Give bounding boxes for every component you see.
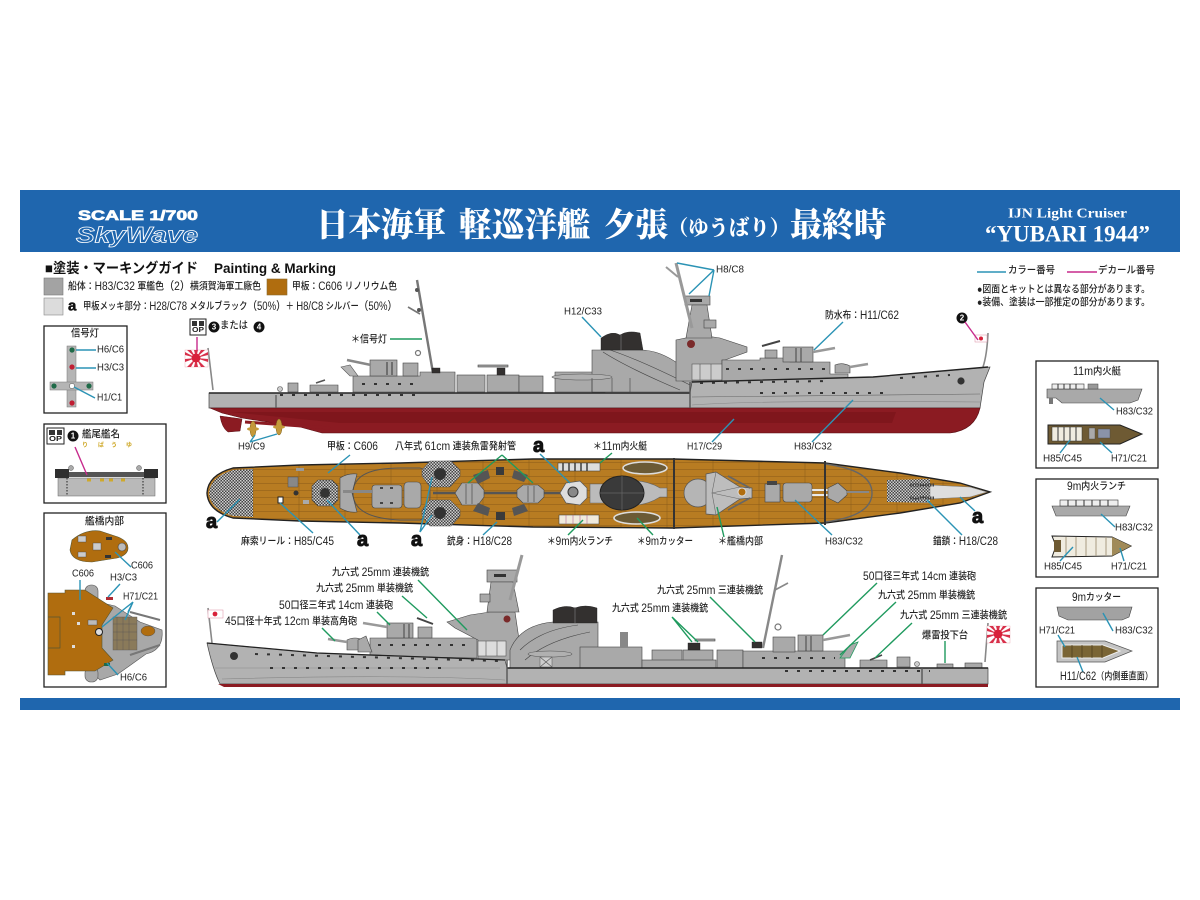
SkyWave logo: SkyWave: [76, 222, 198, 248]
callout: plated a aft tub: [327, 500, 369, 551]
callout: 14cm gun aft: 50口径三年式 14cm 連装砲: [863, 570, 976, 583]
forward superstructure and guns: [722, 341, 868, 381]
aft superstructure: [278, 360, 605, 392]
callouts: 11m boat colours: [1043, 398, 1153, 464]
panel: stern ship name: 艦尾艦名: [82, 428, 120, 440]
midship gun base: [560, 481, 587, 505]
panel: bridge interior: 艦橋内部: [85, 514, 124, 528]
callout: single 25mm aft: 九六式 25mm 単装機銃: [878, 588, 975, 602]
option note with markers 3 or 4: または: [220, 320, 248, 332]
number 1 marker: 1: [71, 432, 76, 440]
callouts: bridge colours: H71/C21: [123, 592, 158, 602]
midship superstructure: [580, 632, 762, 668]
aft gun group: [340, 468, 430, 520]
callout: plated a bow: [960, 497, 984, 528]
rudder and propellers: [220, 416, 330, 437]
callout: single 25mm fore: 九六式 25mm 単装機銃: [316, 582, 413, 595]
main title: （ゆうばり）: [668, 216, 790, 240]
lower bridge deck plan: [48, 585, 162, 682]
forward gun group: [765, 461, 872, 525]
notes: ●装備、塗装は一部推定の部分があります。: [977, 296, 1150, 308]
callout: H9/C9: H9/C9: [238, 442, 265, 452]
callout: 11m boat: [593, 440, 647, 463]
callout: triple 25mm mid: [657, 584, 763, 642]
paint legend: 甲板メッキ部分：H28/C78 メタルブラック（50%）＋ H8/C8 シルバー（50%）: [83, 300, 397, 313]
callouts: cutter colours: H71/C21: [1039, 626, 1075, 636]
deck outline: [207, 459, 990, 528]
stern drawing: [55, 466, 158, 496]
callout: deck colour: 甲板：C606: [327, 440, 378, 453]
callout: stern ensign decal: [196, 337, 198, 350]
english subtitle: [985, 206, 1150, 246]
funnel plan: [590, 476, 667, 510]
callouts: 11m boat colours: H85/C45: [1043, 454, 1082, 464]
aft superstructure and guns: [743, 635, 982, 668]
cutter top view: [1057, 641, 1132, 662]
option note with markers 3 or 4: OP: [192, 327, 204, 334]
boat side view: [1047, 384, 1142, 404]
callout: plated a stern: [206, 499, 240, 533]
callout: twin 25mm fore: 九六式 25mm 連装機銃: [332, 566, 429, 579]
callout: H17/C29: H17/C29: [687, 442, 722, 452]
callout: gun barrel: [447, 522, 512, 548]
decal letters: [82, 441, 132, 449]
callouts: bridge colours: C606: [72, 568, 94, 580]
callouts: 11m boat colours: H83/C32: [1116, 406, 1153, 418]
bow anchor deck: [887, 479, 987, 503]
callout: 12cm AA gun: [225, 614, 357, 641]
notes: [977, 282, 1150, 308]
callout: plated a midship: a: [533, 435, 545, 457]
callout: triple 25mm mid: 九六式 25mm 三連装機銃: [657, 584, 763, 597]
panel: signal lights: 信号灯: [71, 326, 99, 340]
callouts: bridge colours: H3/C3: [110, 572, 137, 584]
funnel and trunking: [552, 332, 692, 392]
callout: deck colour: [327, 440, 378, 473]
gun tub: aft: [312, 480, 338, 506]
callout: number 2 bow jack: 2: [960, 314, 965, 322]
boat top view: [1048, 425, 1142, 444]
callouts: signal colours: H3/C3: [97, 362, 124, 374]
callout: hemp reel: [241, 503, 334, 548]
callout: bridge interior: ＊艦橋内部: [718, 534, 763, 548]
callout: 9m cutter: ＊9mカッター: [637, 536, 693, 548]
paint legend: a: [68, 298, 77, 314]
callouts: bridge colours: C606: [131, 560, 153, 572]
callout: twin 25mm mid: [612, 602, 708, 642]
bottom band: [20, 698, 1180, 710]
callout: H12/C33: [564, 306, 602, 337]
bow jack: [208, 608, 223, 643]
aft mast: [763, 555, 788, 648]
deck plan: [207, 458, 990, 529]
panel: 9m cutter: [1036, 588, 1158, 687]
callouts: signal colours: [74, 344, 124, 404]
top ship callouts: [197, 263, 978, 452]
paint legend: [44, 278, 397, 315]
callouts: bridge colours: [72, 552, 158, 684]
icon: option marker: OP: [49, 436, 62, 443]
decal letters: ば: [98, 441, 104, 449]
callout: depth charge rack: 爆雷投下台: [922, 628, 968, 642]
decal letters: り: [82, 441, 88, 449]
callout: signal lamp: [351, 332, 422, 346]
panel: signal lights: [44, 326, 127, 413]
gun tubs: waist: [422, 461, 460, 526]
callout: H9/C9: [238, 434, 277, 452]
stern ensign: [985, 623, 1010, 662]
callout: single 25mm aft: [840, 588, 975, 655]
panel: 9m motor launch: 9m内火ランチ: [1067, 480, 1126, 493]
swatch: deck: [267, 279, 287, 295]
callout: plated a bow: a: [972, 506, 984, 528]
main title: [316, 206, 886, 244]
bow jack: [975, 333, 988, 367]
callout: single 25mm fore: [316, 582, 427, 618]
callout: 9m launch: [547, 520, 613, 548]
stern ensign: [185, 348, 213, 390]
aft mast: [408, 280, 433, 373]
callout: plated a midship: [533, 435, 570, 483]
callout: H8/C8: [677, 263, 744, 296]
deck plan callouts: [206, 435, 998, 551]
callouts: launch colours: [1044, 514, 1153, 572]
callout: H17/C29: [687, 419, 734, 452]
painting guide heading: ■塗装・マーキングガイド: [45, 260, 198, 276]
callout: plated a waist tubs: [411, 477, 432, 551]
callout: 14cm gun fore: 50口径三年式 14cm 連装砲: [279, 598, 393, 612]
callouts: launch colours: H85/C45: [1044, 562, 1082, 572]
boats on deck plan: [558, 462, 667, 524]
callout: triple 25mm aft: 九六式 25mm 三連装機銃: [900, 608, 1007, 622]
callouts: signal colours: H1/C1: [97, 392, 122, 404]
panel: 11m motor boat: [1036, 361, 1158, 468]
callout: twin 25mm fore: [332, 566, 467, 630]
callout: bridge interior: [717, 507, 763, 548]
painting guide heading: Painting & Marking: [214, 260, 336, 276]
callout: 14cm gun fore: [279, 598, 393, 625]
decal letters: ゆ: [126, 442, 132, 449]
callout: waterproof cloth: [814, 308, 899, 350]
callout: 14cm gun aft: [823, 570, 976, 635]
english subtitle: IJN Light Cruiser: [1008, 206, 1127, 222]
panel: stern ship name: [44, 424, 166, 503]
callout: depth charge rack: [922, 628, 968, 663]
notes: ●図面とキットとは異なる部分があります。: [977, 282, 1150, 296]
option note with markers 3 or 4: 3: [212, 322, 217, 332]
line colour legend: デカール番号: [1098, 264, 1155, 276]
callout: twin 25mm mid: 九六式 25mm 連装機銃: [612, 602, 708, 615]
stern plated area: [209, 469, 253, 517]
callout: turret colour: [795, 500, 863, 548]
launch side view: [1052, 500, 1130, 516]
swatch: plated deck: [44, 298, 63, 315]
launch top view: [1052, 536, 1131, 557]
callout: H83/C32 hull: H83/C32: [794, 442, 832, 452]
callouts: signal colours: H6/C6: [97, 344, 124, 356]
callouts: cutter colours: H83/C32: [1115, 626, 1153, 636]
swatch: hull: [44, 278, 63, 295]
line colour legend: カラー番号: [1008, 264, 1055, 276]
callout: hemp reel: 麻索リール：H85/C45: [241, 534, 334, 548]
callout: 9m launch: ＊9m内火ランチ: [547, 534, 613, 548]
callout: plated a aft tub: a: [357, 529, 369, 551]
hull: [207, 643, 988, 687]
forward gun group: [328, 618, 477, 658]
beam bar: [673, 458, 675, 529]
callout: 9m cutter: [637, 518, 693, 548]
callouts: cutter colours: [1039, 613, 1153, 683]
option note with markers 3 or 4: 4: [257, 322, 262, 332]
callout: anchor chain: 錨鎖：H18/C28: [933, 534, 998, 548]
panel: 11m motor boat: 11m内火艇: [1073, 364, 1121, 378]
callout: gun barrel: 銃身：H18/C28: [447, 534, 512, 548]
top ship: starboard profile: [185, 263, 990, 437]
callout: plated a stern: a: [206, 511, 218, 533]
bridge tower and foremast: [666, 263, 747, 381]
callout: signal lamp: ＊信号灯: [351, 332, 387, 346]
callout: waterproof cloth: 防水布：H11/C62: [825, 308, 899, 322]
bottom ship: port profile: [207, 555, 1010, 687]
panel: 9m cutter: 9mカッター: [1072, 592, 1121, 604]
callout: number 2 bow jack: [956, 312, 978, 340]
panel: bridge interior: [44, 513, 166, 687]
callout: torpedo tubes: 八年式 61cm 連装魚雷発射管: [395, 440, 516, 453]
decal letters: う: [111, 441, 117, 449]
callout: 12cm AA gun: 45口径十年式 12cm 単装高角砲: [225, 614, 357, 628]
line colour legend: [977, 264, 1155, 276]
main title: 最終時: [790, 207, 886, 244]
upper bridge deck plan: [70, 531, 128, 562]
callouts: launch colours: H83/C32: [1115, 522, 1153, 534]
callout: 11m boat: ＊11m内火艇: [593, 440, 647, 453]
paint legend: 甲板：C606 リノリウム色: [292, 280, 397, 293]
deck fittings: [278, 468, 309, 504]
main title: 日本海軍: [316, 206, 446, 244]
callout: H83/C32 hull: [794, 400, 853, 452]
callout: torpedo tubes: [395, 440, 533, 483]
scale label: SCALE 1/700: [78, 207, 198, 223]
bottom ship callouts: [225, 566, 1007, 663]
callouts: launch colours: H71/C21: [1111, 562, 1147, 572]
cutter side view: [1057, 607, 1132, 620]
paint legend: 船体：H83/C32 軍艦色（2）横須賀海軍工廠色: [68, 280, 261, 293]
header band: [20, 190, 1180, 252]
painting guide heading: [45, 260, 336, 276]
signal light cross: [50, 346, 93, 407]
callout: H12/C33: H12/C33: [564, 306, 602, 318]
hull: [209, 367, 990, 433]
main title: 夕張: [603, 207, 668, 244]
english subtitle: “YUBARI 1944”: [985, 222, 1150, 246]
bridge tower and foremast: [447, 555, 522, 660]
callout: triple 25mm aft: [875, 608, 1007, 658]
callout: plated a waist tubs: a: [411, 529, 423, 551]
callouts: 11m boat colours: H71/C21: [1111, 454, 1147, 464]
main title: 軽巡洋艦: [459, 207, 590, 244]
funnel and trunking: [510, 606, 598, 668]
option note with markers 3 or 4: [190, 319, 264, 335]
torpedo tubes: [433, 467, 565, 520]
callout: turret colour: H83/C32: [825, 536, 863, 548]
callout: H8/C8: H8/C8: [716, 264, 744, 276]
callouts: cutter colours: H11/C62（内側垂直面）: [1060, 670, 1153, 683]
panel: 9m motor launch: [1036, 479, 1158, 577]
callouts: bridge colours: H6/C6: [120, 672, 147, 684]
bridge plan: [684, 472, 752, 515]
callout: anchor chain: [927, 500, 998, 548]
